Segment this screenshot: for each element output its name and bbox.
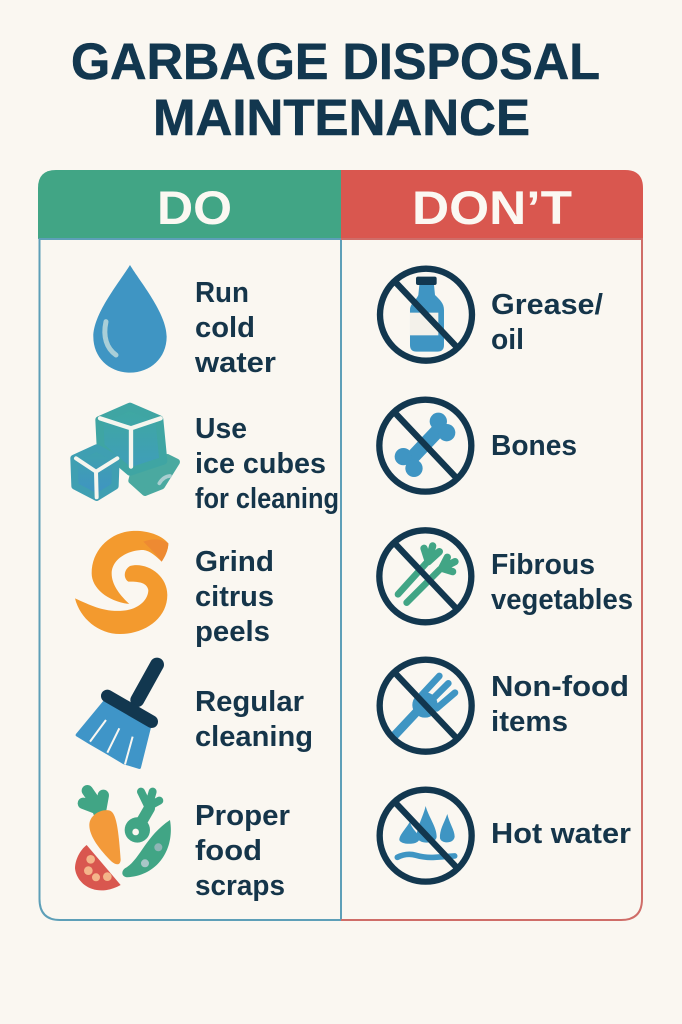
text: bones: Bones [491, 430, 577, 462]
text: fibrous vegetables: vegetables [491, 584, 633, 616]
panel: do column [38, 170, 341, 920]
icon: no fork [380, 660, 472, 752]
text: non-food items: items [491, 706, 568, 738]
icon: water drop [93, 265, 167, 373]
text: run cold water: Run [195, 277, 249, 309]
text: grease/oil [491, 289, 603, 356]
icon: cleaning brush [77, 665, 157, 767]
don't column header: DON’T [412, 181, 572, 234]
text: run cold water: water [194, 347, 276, 379]
text: proper food scraps: Proper [195, 800, 290, 832]
text: regular cleaning: Regular [195, 686, 304, 718]
text: grind citrus peels: citrus [195, 581, 274, 613]
text: run cold water [194, 277, 276, 379]
text: proper food scraps [195, 800, 290, 902]
text: proper food scraps: scraps [195, 870, 285, 902]
icon: no fibrous vegetables [379, 530, 471, 622]
don't column header [341, 170, 643, 239]
text: grind citrus peels: peels [195, 616, 270, 648]
icon: ice cubes [74, 407, 177, 497]
text: regular cleaning: cleaning [195, 721, 313, 753]
text: non-food items: Non-food [491, 671, 629, 703]
icon: no hot water [380, 790, 472, 882]
text: regular cleaning [195, 686, 313, 753]
text: fibrous vegetables: Fibrous [491, 549, 595, 581]
text: grind citrus peels [195, 546, 274, 648]
text: grind citrus peels: Grind [195, 546, 274, 578]
title: MAINTENANCE [153, 89, 530, 146]
text: use ice cubes for cleaning [195, 413, 339, 515]
panel: don't column [341, 170, 643, 920]
title: GARBAGE DISPOSAL [71, 33, 600, 90]
text: use ice cubes for cleaning: ice cubes [195, 448, 326, 480]
text: run cold water: cold [195, 312, 255, 344]
do column border [40, 239, 341, 920]
do column header [38, 170, 341, 239]
text: non-food items [491, 671, 629, 738]
text: hot water: Hot water [491, 818, 631, 850]
text: fibrous vegetables [491, 549, 633, 616]
text: use ice cubes for cleaning: for cleaning [195, 483, 339, 515]
text: grease/oil: oil [491, 324, 524, 356]
text: use ice cubes for cleaning: Use [195, 413, 247, 445]
icon: food scraps [75, 791, 171, 890]
icon: citrus peel [75, 531, 168, 634]
text: proper food scraps: food [195, 835, 262, 867]
icon: no grease bottle [380, 269, 472, 361]
do column header: DO [157, 181, 232, 234]
text: grease/oil: Grease/ [491, 289, 603, 321]
don't column border [341, 239, 642, 920]
icon: no bones [379, 400, 471, 492]
title [71, 33, 600, 146]
